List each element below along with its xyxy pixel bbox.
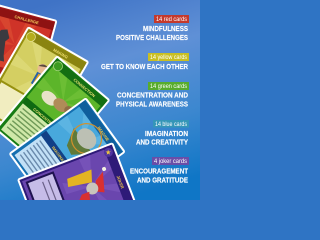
card: green concentration: CONNECTION (72, 77, 96, 98)
text panel: IMAGINATION (51, 145, 71, 170)
icon: boy character (29, 62, 59, 93)
card: green concentration (0, 55, 111, 174)
icon: floating island (59, 117, 108, 164)
legend: red cards: 14 red cards (156, 17, 187, 23)
icon: rocks (39, 86, 79, 123)
icon: badge (25, 31, 37, 43)
legend: blue cards: 14 blue cards (155, 122, 187, 128)
legend: blue cards (136, 120, 189, 147)
icon: badge (52, 60, 64, 73)
legend: blue cards: IMAGINATION (145, 129, 188, 138)
legend: yellow cards: 14 yellow cards (150, 55, 187, 61)
card: blue imagination: IMAGINE (96, 125, 111, 142)
card: purple joker (17, 142, 137, 240)
text panel: CONCENTRATION (32, 107, 62, 133)
legend: green cards (116, 82, 189, 109)
card: red challenge (0, 2, 58, 115)
legend: joker cards: ENCOURAGEMENT (130, 167, 188, 176)
legend: green cards: 14 green cards (150, 84, 187, 90)
icon: star (103, 147, 114, 158)
legend: red cards: MINDFULNESS (143, 24, 188, 33)
text panel (26, 171, 74, 234)
card: purple joker: JOKER (116, 175, 125, 189)
legend: blue cards: AND CREATIVITY (136, 138, 188, 147)
card: yellow making (0, 26, 89, 146)
icon: jester (64, 165, 118, 214)
card: purple joker: ★ (103, 148, 113, 157)
legend: green cards: CONCENTRATION AND (117, 91, 188, 100)
background (0, 0, 200, 200)
icon: chess knight (0, 27, 12, 62)
card: blue imagination (8, 97, 126, 208)
legend: joker cards: AND GRATITUDE (137, 176, 188, 185)
legend: joker cards (130, 157, 189, 185)
card: red challenge: CHALLENGE (14, 14, 40, 25)
legend: yellow cards (101, 53, 189, 71)
card: yellow making: MAKING (52, 47, 69, 60)
legend: red cards (116, 15, 189, 42)
legend: joker cards: 4 joker cards (154, 159, 187, 165)
